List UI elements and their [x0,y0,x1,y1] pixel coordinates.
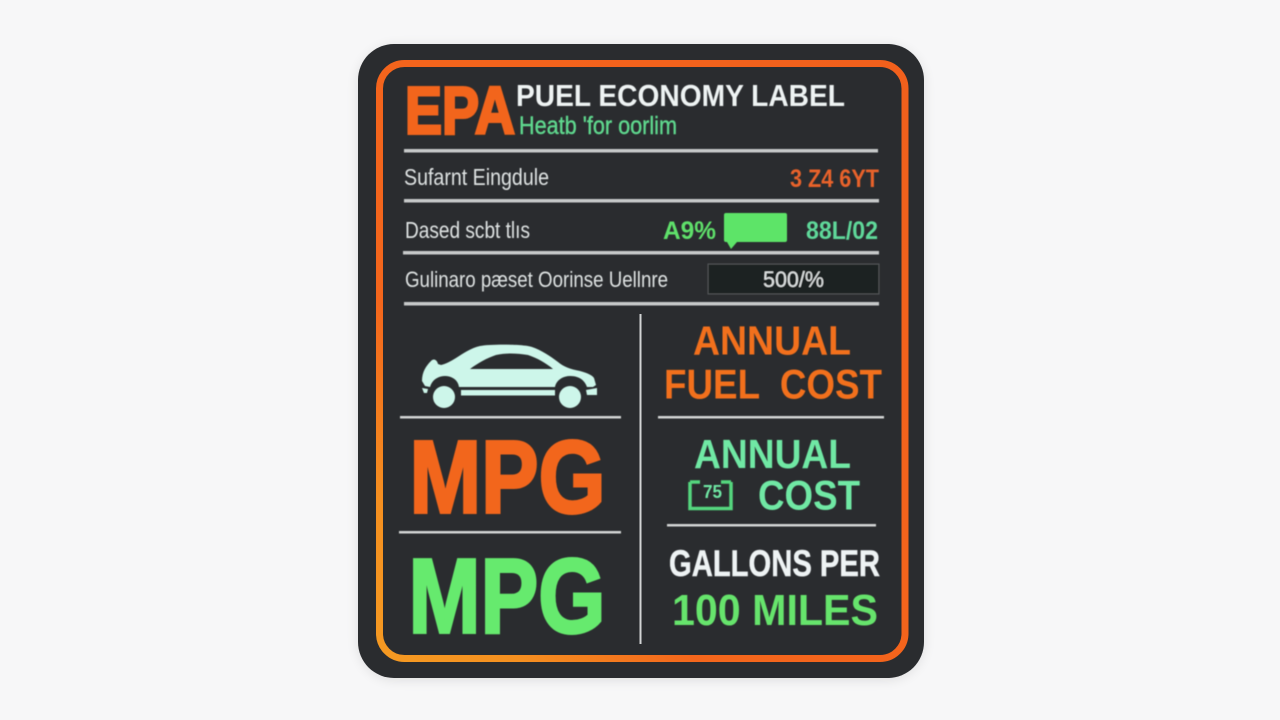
icon: car [422,345,597,408]
annual fuel cost: ANNUAL [693,318,851,364]
row 3 value box: 500/% [763,267,824,292]
heading: PUEL ECONOMY LABEL [516,78,845,113]
100 miles: 100 MILES [672,586,878,635]
right column [658,318,884,635]
annual cost: ANNUAL [694,431,851,477]
green indicator [724,213,787,249]
MPG orange: MPG [410,420,606,534]
annual fuel cost: FUEL COST [664,360,882,408]
annual cost: COST [758,472,860,518]
row 3 label: Gulinaro pæset Oorinse Uellnre [405,267,668,292]
icon: price sign [690,482,731,508]
row 2 label: Dased scbt tlıs [405,217,530,243]
info rows [403,149,879,306]
icon: price sign: 75 [703,482,722,502]
MPG green: MPG [408,538,606,656]
left column [399,345,621,656]
row 1 value: 3 Z4 6YT [790,165,879,193]
header [405,74,845,148]
row 2 value right: 88L/02 [806,217,878,245]
subtitle: Heatb 'for oorlim [519,112,677,140]
annual fuel cost [664,318,882,408]
gallons per: GALLONS PER [669,543,880,584]
annual cost [690,431,860,518]
EPA logo: EPA [405,74,515,148]
row 2 value left: A9% [663,217,716,245]
row 3 value box [708,264,879,294]
row 1 label: Sufarnt Eingdule [404,164,549,190]
label card [358,44,924,680]
